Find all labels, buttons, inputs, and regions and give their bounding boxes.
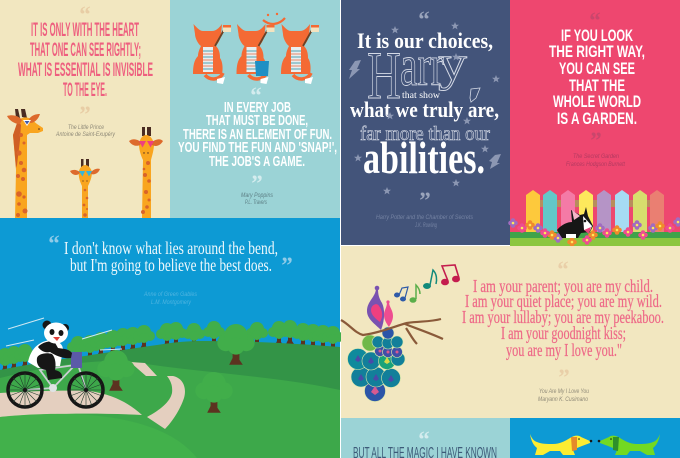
fence (526, 190, 664, 235)
panel: foxes quote (170, 0, 340, 218)
bicycle (8, 355, 103, 407)
quote text: IN EVERY JOB (224, 99, 291, 116)
panel: panda quote (0, 218, 344, 458)
icon: music notes (394, 265, 460, 302)
panel: dogs quote (510, 418, 680, 458)
panel: garden quote (508, 0, 680, 247)
opening quote mark: “ (250, 83, 262, 108)
opening quote mark: “ (589, 8, 601, 33)
speed lines (6, 318, 122, 350)
tail feathers (348, 327, 405, 402)
opening quote mark: “ (418, 427, 430, 452)
icon: smile (263, 13, 285, 24)
quote text: y (438, 35, 467, 91)
quote text: far more than our (360, 123, 490, 145)
branch (341, 319, 443, 344)
attribution: Frances Hodgson Burnett (566, 162, 625, 168)
quote text: what we truly are, (350, 97, 499, 122)
quote text: that show (402, 90, 441, 100)
quote text: IS A GARDEN. (557, 109, 637, 128)
quote text (18, 20, 153, 101)
attribution (241, 193, 273, 206)
quote text: THE JOB'S A GAME. (209, 153, 305, 170)
road (0, 391, 142, 417)
back hill (0, 341, 340, 458)
attribution: Maryann K. Cusimano (538, 397, 589, 403)
attribution: L.M. Montgomery (151, 300, 192, 306)
closing quote mark: ” (590, 128, 602, 153)
attribution (538, 389, 590, 403)
path branch (130, 362, 185, 429)
panel: giraffes quote: IT IS ONLY WITH THE HEART (31, 20, 139, 41)
quote text (462, 276, 664, 360)
icon: yellow dog (530, 434, 592, 455)
closing quote mark: ” (79, 102, 91, 127)
closing quote mark: ” (251, 171, 263, 196)
quote text: abilities. (363, 133, 485, 183)
attribution: The Little Prince (68, 125, 105, 131)
attribution: Anne of Green Gables (143, 292, 197, 298)
quote text: THERE IS AN ELEMENT OF FUN. (183, 126, 332, 143)
quote text: TO THE EYE. (63, 80, 107, 101)
quote text (549, 26, 645, 128)
foreground hill (0, 414, 197, 458)
large trees (97, 324, 255, 413)
green note (410, 285, 420, 302)
quote text (178, 99, 337, 170)
attribution: The Secret Garden (573, 154, 620, 160)
quote text: It is our choices, (357, 28, 493, 53)
back tree row (0, 320, 344, 372)
icon: tall giraffe (7, 109, 43, 218)
quote text: THAT THE (569, 76, 625, 95)
quote text: YOU CAN SEE (559, 59, 635, 78)
icon: paint bucket (255, 61, 269, 76)
panel: giraffes quote (0, 0, 170, 218)
red note (442, 265, 460, 285)
quote text: arr (400, 33, 444, 98)
closing quote mark: ” (419, 188, 431, 213)
basket (71, 352, 82, 368)
panda (28, 320, 72, 380)
blue note (394, 287, 408, 301)
quote text: H (367, 37, 401, 113)
icon: panda on bicycle (8, 320, 103, 407)
attribution: P.L. Travers (245, 200, 267, 206)
icon: green dog (598, 434, 660, 455)
opening quote mark: “ (48, 231, 60, 256)
closing quote mark: ” (558, 365, 570, 390)
decorative stars and lightning bolts (349, 22, 501, 194)
peacock bodies (367, 288, 384, 330)
flower bed (508, 217, 680, 247)
panel: giraffes quote: THAT ONE CAN SEE RIGHTLY; (30, 40, 141, 61)
opening quote mark: “ (79, 2, 91, 27)
attribution (566, 154, 625, 168)
mid hill (0, 361, 340, 458)
attribution: J.K. Rowling (414, 223, 437, 229)
attribution: Antoine de Saint-Exupéry (55, 132, 116, 138)
teal note (424, 270, 437, 288)
panel: peacock quote (341, 246, 680, 418)
quote text: THAT MUST BE DONE, (206, 112, 308, 129)
quote text: YOU FIND THE FUN AND 'SNAP!', (178, 139, 337, 156)
quote text: I don't know what lies around the bend, (64, 238, 278, 258)
attribution (143, 292, 197, 306)
icon: three painting foxes (193, 13, 319, 84)
closing quote mark: ” (281, 253, 293, 278)
quote text (64, 238, 278, 275)
text: WHAT IS ESSENTIAL IS INVISIBLE (18, 60, 153, 81)
quote text (350, 28, 499, 183)
opening quote mark: “ (418, 7, 430, 32)
panel: Harry Potter quote (341, 0, 510, 245)
quote text: but I'm going to believe the best does. (70, 255, 272, 275)
attribution: Harry Potter and the Chamber of Secrets (376, 215, 473, 221)
landscape (0, 320, 344, 458)
quote text: you are my I love you." (506, 340, 622, 360)
icon: peacock on branch (341, 286, 443, 402)
icon: black and white dog (557, 207, 593, 238)
attribution (376, 215, 473, 229)
attribution: You Are My I Love You (539, 389, 590, 395)
icon: right giraffe (129, 127, 163, 218)
panel: magic quote (341, 418, 510, 458)
attribution: Mary Poppins (241, 193, 273, 199)
icon: small giraffe (70, 159, 100, 218)
quote text: IF YOU LOOK (561, 26, 633, 45)
attribution (55, 125, 116, 138)
opening quote mark: “ (557, 257, 569, 282)
